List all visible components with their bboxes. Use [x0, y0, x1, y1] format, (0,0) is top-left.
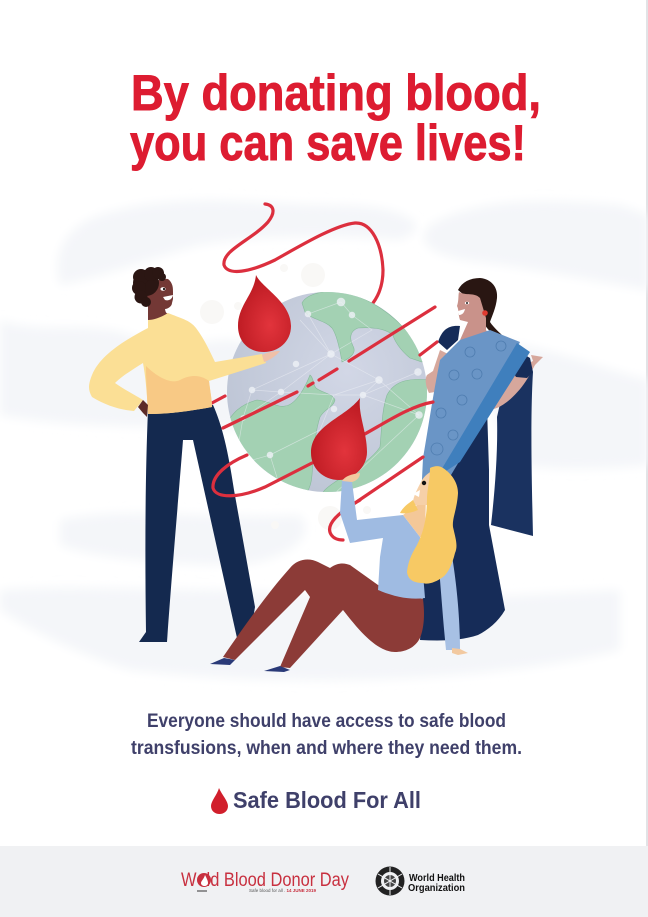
- faint circles around the globe: [200, 263, 371, 530]
- blood drop held by man: [238, 275, 291, 352]
- sweater shadow: [146, 366, 212, 414]
- globe: [227, 292, 427, 492]
- sweater: [340, 480, 425, 599]
- footer band: [0, 846, 648, 917]
- man sweater: [89, 313, 266, 414]
- man hand: [138, 400, 148, 417]
- man: [89, 267, 266, 642]
- man neck and face: [147, 279, 173, 320]
- face: [413, 470, 437, 505]
- WHO emblem: [376, 866, 404, 896]
- blood drop held by blonde woman: [311, 398, 367, 480]
- man curly hair: [132, 267, 166, 307]
- sari border: [428, 343, 530, 492]
- illustration: [89, 204, 543, 672]
- logo globe: [197, 873, 211, 891]
- sleeve right: [507, 352, 533, 378]
- woman left arm: [426, 350, 448, 393]
- sari pallu: [421, 330, 520, 500]
- message text: transfusions, when and where they need them.: [131, 738, 522, 759]
- woman smile, eye and earring: [458, 302, 488, 316]
- trousers: [223, 560, 424, 668]
- woman in sari: [420, 278, 543, 640]
- World Blood Donor Day logo: [181, 870, 349, 893]
- seated woman: [210, 466, 468, 672]
- sari motifs: [431, 341, 506, 455]
- message text: [131, 711, 522, 759]
- WHO name: World Health: [409, 872, 465, 884]
- WHO name: [408, 872, 465, 894]
- woman right arm: [485, 355, 543, 409]
- message text: Everyone should have access to safe blood: [147, 711, 506, 732]
- red line behind globe: [210, 204, 383, 540]
- eye and smile: [413, 481, 426, 497]
- blouse sleeve: [438, 326, 460, 350]
- man holding hand: [262, 351, 280, 362]
- WHO logo: [376, 866, 465, 896]
- logo text: W rld Blood Donor Day: [181, 870, 349, 891]
- raised hand: [342, 473, 360, 482]
- sari drape: [491, 368, 533, 536]
- continents: [230, 292, 427, 492]
- hand on ground: [452, 648, 468, 655]
- right arm: [438, 556, 460, 650]
- sari skirt: [420, 407, 505, 640]
- woman head and neck: [457, 292, 490, 340]
- red line over globe: [213, 307, 437, 503]
- title: [130, 65, 541, 171]
- logo tagline: Safe blood for all . 14 JUNE 2019: [249, 888, 317, 893]
- woman hair: [458, 278, 503, 336]
- slogan text: Safe Blood For All: [233, 787, 421, 813]
- slogan: [211, 787, 421, 814]
- network lines: [235, 298, 422, 500]
- icon: blood drop: [211, 788, 228, 814]
- title: By donating blood,: [131, 65, 541, 121]
- shoes: [210, 658, 290, 672]
- man eye and smile: [160, 287, 173, 300]
- background clouds: [0, 201, 648, 680]
- man legs: [139, 405, 255, 642]
- neck: [403, 492, 426, 540]
- title: you can save lives!: [130, 115, 526, 171]
- hair lock: [400, 500, 418, 513]
- WHO name: Organization: [408, 882, 465, 894]
- hair: [407, 466, 458, 584]
